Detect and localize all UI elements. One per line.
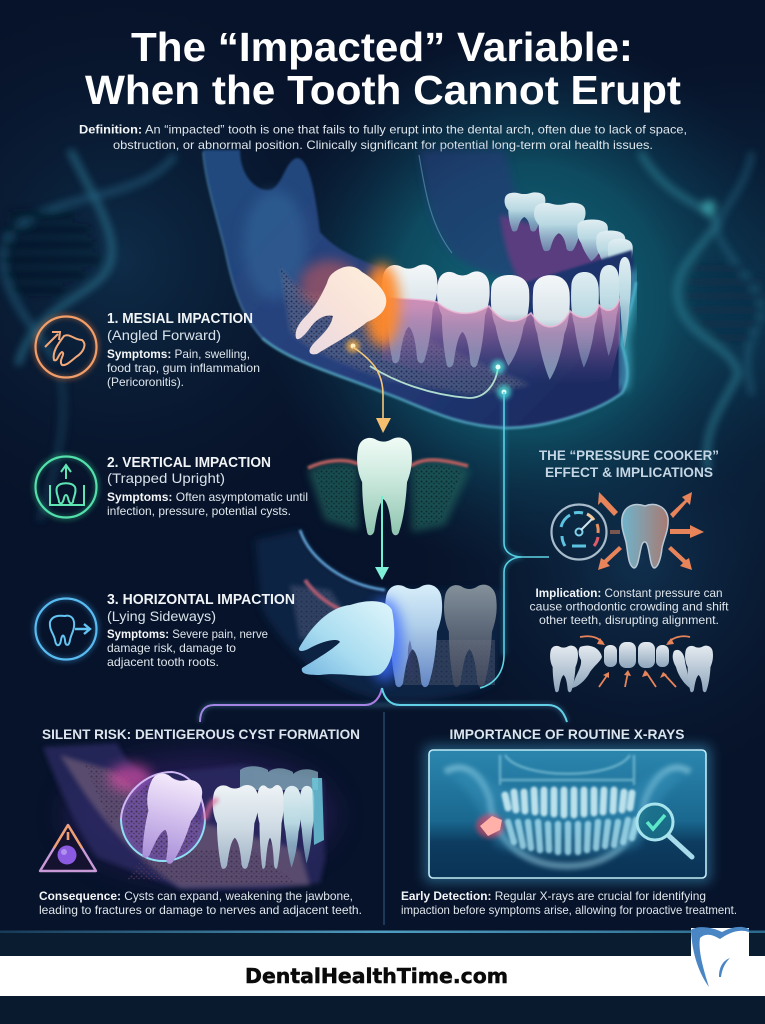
- footer dark band: [0, 933, 765, 956]
- text: horizontal impaction: Symptoms: Severe pain, nerve: [107, 627, 268, 641]
- text: implication: [530, 586, 729, 627]
- text: vertical impaction: (Trapped Upright): [107, 470, 225, 486]
- cyst illustration: [43, 743, 335, 890]
- icon: vertical impaction: [35, 456, 97, 518]
- text: implication: cause orthodontic crowding and shift: [530, 600, 729, 614]
- footer white band: [0, 956, 765, 996]
- horizontal impaction illustration: [255, 530, 500, 701]
- gum line: [382, 296, 620, 327]
- text: early detection: Early Detection: Regular X-rays are crucial for identifying: [401, 889, 706, 903]
- website name: DentalHealthTime.com: [245, 964, 508, 988]
- section divider: [383, 712, 385, 925]
- panel: x-ray: [424, 745, 711, 883]
- footer rule: [0, 930, 765, 934]
- impacted tooth highlight: [476, 814, 504, 838]
- title: The “Impacted” Variable:: [131, 24, 633, 70]
- glow nodes: [346, 339, 511, 399]
- x-ray lower teeth: [508, 820, 636, 852]
- connector: brace to pressure cooker: [480, 392, 549, 688]
- text: horizontal impaction: 3. HORIZONTAL IMPACTION: [107, 591, 295, 608]
- icon: mesial impaction: [35, 316, 97, 378]
- icon: horizontal impaction: [35, 598, 97, 660]
- DNA helix: left: [2, 150, 175, 520]
- ramus highlight: [243, 190, 307, 300]
- back gum: [500, 215, 620, 305]
- text: mesial impaction: [107, 310, 260, 389]
- orange glow: [364, 263, 400, 347]
- back row teeth: [240, 766, 318, 790]
- text: implication: other teeth, disrupting alignment.: [539, 613, 719, 627]
- icon: pressure tooth: [622, 504, 668, 568]
- icon: pressure gauge: [552, 504, 606, 560]
- text: mesial impaction: 1. MESIAL IMPACTION: [107, 310, 253, 327]
- cyst wisdom tooth: [132, 770, 205, 868]
- text: consequence: Consequence: Cysts can expand, weakening the jawbone,: [39, 889, 353, 903]
- far jaw: [419, 150, 625, 283]
- front teeth: [382, 257, 631, 380]
- logo: [691, 927, 749, 987]
- heading: pressure cooker: [539, 447, 719, 480]
- icon: warning triangle: [40, 825, 96, 871]
- jaw glow rim: [262, 282, 636, 428]
- main jaw illustration: [203, 150, 636, 428]
- lower jaw bone: [203, 150, 636, 428]
- text: horizontal impaction: (Lying Sideways): [107, 608, 216, 624]
- text: horizontal impaction: adjacent tooth roots.: [107, 655, 219, 669]
- connector: horizontal section lines: [200, 688, 567, 722]
- pressure arrows: [598, 492, 704, 570]
- dentigerous cyst: [121, 777, 205, 861]
- text: vertical impaction: [107, 454, 308, 518]
- text: mesial impaction: Symptoms: Pain, swelling,: [107, 347, 250, 361]
- footer lower band: [0, 996, 765, 1024]
- horizontal wisdom tooth: [299, 601, 394, 676]
- heading: x-rays: IMPORTANCE OF ROUTINE X-RAYS: [450, 726, 684, 742]
- text: horizontal impaction: [107, 591, 295, 669]
- title: When the Tooth Cannot Erupt: [85, 67, 681, 113]
- DNA helix: right: [640, 152, 765, 470]
- x-ray upper teeth: [505, 790, 632, 815]
- x-ray skull and jaw: [445, 750, 690, 878]
- arrow: mesial to vertical: [353, 347, 391, 433]
- text: horizontal impaction: damage risk, damage to: [107, 641, 236, 655]
- text: vertical impaction: 2. VERTICAL IMPACTION: [107, 454, 271, 471]
- icon: crowded teeth row: [550, 636, 713, 692]
- text: mesial impaction: food trap, gum inflammation: [107, 361, 260, 375]
- bone speckle: [280, 265, 530, 395]
- wisdom tooth: mesial: [296, 266, 386, 354]
- heading: pressure cooker: THE “PRESSURE COOKER”: [539, 447, 719, 463]
- text: vertical impaction: Symptoms: Often asymptomatic until: [107, 490, 308, 504]
- adjacent tooth roots: [395, 640, 495, 685]
- text: early detection: impaction before symptoms arise, allowing for proactive treatment.: [401, 903, 737, 917]
- title: [85, 24, 681, 113]
- icon: magnifier: [637, 804, 692, 857]
- text: mesial impaction: (Pericoronitis).: [107, 375, 184, 389]
- heading: pressure cooker: EFFECT & IMPLICATIONS: [545, 464, 713, 480]
- back teeth: [505, 192, 633, 284]
- definition text: obstruction, or abnormal position. Clinically significant for potential long-term oral health issues.: [113, 138, 653, 152]
- text: implication: Implication: Constant pressure can: [536, 586, 722, 600]
- text: vertical impaction: infection, pressure, potential cysts.: [107, 504, 291, 518]
- text: mesial impaction: (Angled Forward): [107, 327, 221, 343]
- vertical impaction tooth: [308, 437, 470, 535]
- gum band: [382, 296, 620, 395]
- text: early detection: [401, 889, 737, 917]
- text: consequence: [39, 889, 362, 917]
- text: consequence: leading to fractures or damage to nerves and adjacent teeth.: [39, 903, 362, 917]
- heading: silent risk: SILENT RISK: DENTIGEROUS CYST FORMATION: [42, 726, 360, 742]
- definition text: [79, 122, 687, 152]
- adjacent teeth: [213, 785, 314, 869]
- definition text: Definition: An “impacted” tooth is one that fails to fully erupt into the dental arch, often due to lack of space,: [79, 122, 687, 136]
- arrow: vertical to horizontal: [375, 496, 389, 580]
- nerve path: orange to teal: [370, 366, 498, 398]
